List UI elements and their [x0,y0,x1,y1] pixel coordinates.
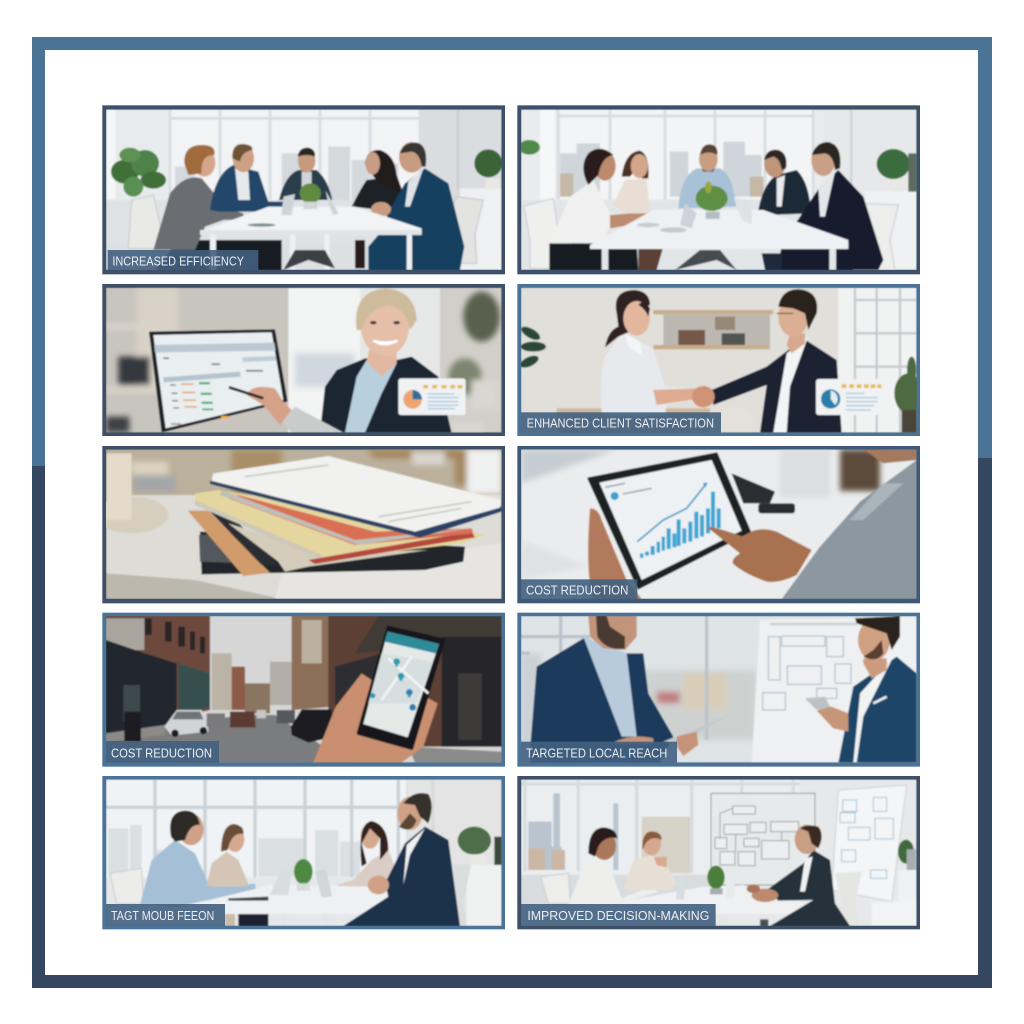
icon: tablet with rising chart [588,453,750,588]
document stack [188,456,502,576]
panel: team at laptops [102,776,505,929]
label: cost reduction (tablet): COST REDUCTION [526,582,628,597]
icon: right plant [893,356,917,433]
icon: left plant [111,148,166,197]
icon: corner plant [519,140,540,155]
card: rating with gauge [816,379,885,415]
icon: saucer and cup [106,452,168,534]
icon: laptops and plant [228,859,332,901]
icon: smartphone with map [358,627,443,748]
icon: table plant [300,183,321,209]
handshake [692,386,715,407]
panel: stack of documents [95,446,505,603]
icon: shelf plant [898,840,916,870]
label: targeted local reach: TARGETED LOCAL REACH [526,745,667,760]
flipchart: right diagram [832,785,907,902]
icon: left tablet [662,725,708,743]
label: cost reduction (street): COST REDUCTION [111,745,212,760]
panel: enhanced team meeting [517,105,920,274]
label: increased efficiency [108,250,258,270]
panel: improved decision-making [517,776,920,929]
icon: shelf plant [877,149,917,192]
card: rating with pie [398,378,466,415]
panel: targeted local reach whiteboard [517,613,920,767]
panel: street with phone map [102,613,505,767]
panel: client handshake [517,284,922,436]
icon: right plant [474,149,502,189]
label: improved decision-making: IMPROVED DECISION-MAKING [527,908,709,923]
icon: shelf plant [458,827,502,865]
label: targeted local reach [521,742,677,763]
label: enhanced client satisfaction [521,412,721,433]
icon: table plant and laptop [676,866,734,899]
icon: table plant [696,181,728,219]
label: increased efficiency: INCREASED EFFICIENCY [112,254,244,269]
panel: tablet with growth chart [517,446,920,603]
panel: increased efficiency meeting [102,105,505,274]
icon: left plant [521,326,547,368]
whiteboard: flow diagram [711,793,815,885]
label: improved decision-making [521,904,716,926]
icon: right tablet [805,696,830,710]
label: enhanced client satisfaction: ENHANCED CLIENT SATISFACTION [527,416,714,431]
label: garbled caption [106,904,225,926]
label: garbled caption: TAGT MOUB FEEON [111,908,214,923]
whiteboard with diagram [752,617,917,763]
panel: woman presenting dashboard [102,284,505,436]
parked cars [164,709,334,743]
shelves with decor [653,310,773,349]
icon: dashboard tablet [149,329,288,433]
label: cost reduction (street) [106,741,219,763]
